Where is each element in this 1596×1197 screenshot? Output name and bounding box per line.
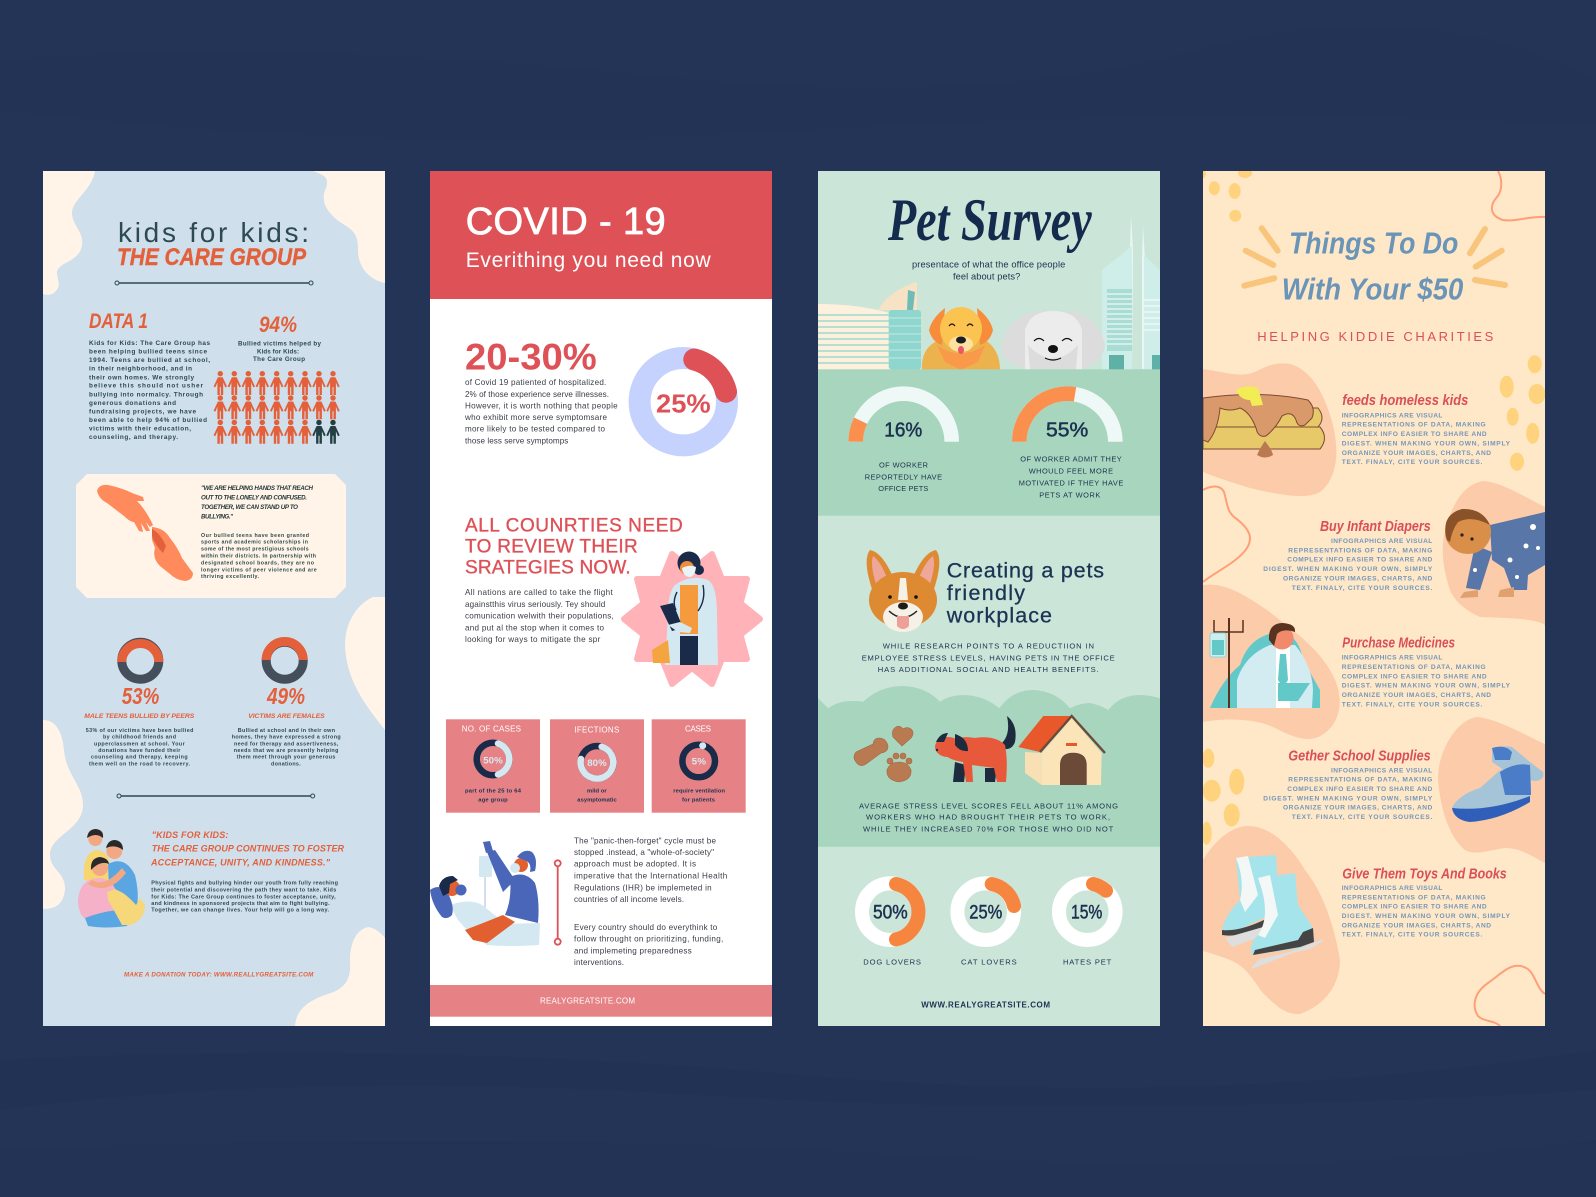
text block: toys: INFOGRAPHICS ARE VISUAL	[1342, 885, 1442, 892]
header band	[430, 171, 772, 299]
text block: diapers: REPRESENTATIONS OF DATA, MAKING	[1288, 547, 1432, 554]
text: quote: TOGETHER, WE CAN STAND UP TO	[201, 504, 298, 511]
stat box: no of cases: age group	[478, 797, 508, 803]
text block: all nations: comunication welwith their populations,	[465, 612, 614, 621]
stat box: cases	[652, 719, 746, 813]
heading: all countries: SRATEGIES NOW.	[465, 557, 631, 578]
chart: 15 percent hates pet: 15%	[1071, 902, 1102, 923]
icon: doctor with IV	[1210, 618, 1320, 708]
illustration: right towers	[1102, 215, 1160, 370]
band: cloud section	[818, 686, 1160, 847]
text block: feeds	[1342, 412, 1511, 466]
text block: intro: 1994. Teens are bullied at school,	[89, 357, 210, 364]
text: research: WHILE RESEARCH POINTS TO A REDUCTIION IN	[883, 642, 1094, 651]
text block: hospitalized: 2% of those experience serve illnesses.	[465, 390, 609, 399]
text: quote: OUT TO THE LONELY AND CONFUSED.	[201, 495, 307, 502]
text: motivated	[1019, 455, 1123, 499]
text block: physical fights: and kindness in sponsored projects that aim to fight bullying.	[151, 901, 330, 907]
chart: 15 percent hates pet: HATES PET	[1063, 958, 1112, 967]
chart: 55 percent gauge: 55%	[1046, 420, 1089, 442]
text block: toys	[1342, 885, 1511, 939]
text: quote: "WE ARE HELPING HANDS THAT REACH	[201, 485, 314, 492]
title: Pet Survey	[887, 187, 1092, 253]
text block: right stat: homes, they have expressed a strong	[232, 735, 341, 741]
text: scholarships	[200, 533, 317, 580]
text block: medicines: INFOGRAPHICS ARE VISUAL	[1342, 655, 1442, 662]
text: scholarships: within their districts. In partnership with	[200, 554, 316, 560]
text: research: HAS ADDITIONAL SOCIAL AND HEALTH BENEFITS.	[878, 665, 1099, 674]
text: office pets: OFFICE PETS	[878, 484, 928, 493]
chart: 50 percent dog lovers: DOG LOVERS	[863, 958, 921, 967]
text block: right stat	[232, 728, 341, 767]
text block: diapers: DIGEST. WHEN MAKING YOUR OWN, SIMPLY	[1263, 566, 1433, 573]
chart: 16 percent gauge	[856, 394, 952, 442]
stat box: no of cases: part of the 25 to 64	[465, 789, 522, 795]
subtitle	[912, 260, 1065, 281]
icon: corgi	[867, 550, 939, 632]
heading: buy infant diapers: Buy Infant Diapers	[1320, 518, 1431, 535]
text block: right stat: them meet through your generous	[237, 755, 335, 761]
text: office pets: OF WORKER	[879, 461, 928, 470]
text block: right stat: needs that we are presently helping	[234, 748, 338, 754]
stat: 20-30%: 20-30%	[465, 336, 597, 377]
text block: medicines: ORGANIZE YOUR IMAGES, CHARTS, AND	[1342, 692, 1491, 699]
footer band: REALYGREATSITE.COM	[540, 996, 635, 1005]
footer: website: WWW.REALYGREATSITE.COM	[921, 1001, 1050, 1010]
text block: panic then forget: imperative that the International Health	[574, 871, 727, 880]
icon: nurse and patient	[430, 841, 540, 946]
stat box: infections: mild or	[587, 789, 607, 795]
text block: all nations: againstthis virus seriously. Tey should	[465, 600, 605, 609]
text block: left stat: by childhood friends and	[103, 735, 176, 741]
text block: left stat: upperclassmen at school. Your	[94, 741, 186, 747]
text block: intro: bullying into normalcy. Through	[89, 391, 203, 398]
text block: supplies: INFOGRAPHICS ARE VISUAL	[1331, 767, 1432, 774]
label: victims females: VICTIMS ARE FEMALES	[248, 713, 325, 720]
text block: physical fights: Physical fights and bullying hinder our youth from fully reaching	[151, 881, 338, 887]
chart: 49 percent donut	[266, 642, 303, 679]
text block: intro: victims with their education,	[89, 425, 191, 432]
text block: intro: generous donations and	[89, 400, 176, 407]
stat box: no of cases	[446, 719, 540, 813]
chart: 15 percent hates pet	[1059, 883, 1116, 967]
text block: medicines	[1342, 655, 1511, 708]
panel: pet survey	[818, 171, 1160, 1026]
title: Things To Do	[1289, 225, 1458, 260]
text block: intro: fundraising projects, we have	[89, 408, 196, 415]
icon: red dog	[935, 716, 1016, 782]
panel: kids for kids	[43, 171, 385, 1026]
icon: dog house	[1018, 716, 1105, 785]
heading: creating pets friendly: workplace	[946, 604, 1052, 628]
text block: physical fights: Together, we can change lives. Your help will go a long way.	[151, 908, 329, 914]
stat box: infections	[550, 719, 644, 813]
text: scholarships: Our bullied teens have been granted	[201, 533, 309, 539]
text block: intro: been able to help 94% of bullied	[89, 417, 207, 424]
text block: hospitalized	[464, 378, 618, 446]
text: research: EMPLOYEE STRESS LEVELS, HAVING PETS IN THE OFFICE	[862, 653, 1115, 662]
text block: physical fights: their potential and discovering the path they want to take. Kids	[151, 888, 336, 894]
heading: all countries	[465, 516, 683, 578]
text block: diapers	[1263, 538, 1433, 592]
text: stress scores: AVERAGE STRESS LEVEL SCORES FELL ABOUT 11% AMONG	[859, 801, 1118, 810]
text block: supplies	[1263, 767, 1433, 821]
title: With Your $50	[1282, 271, 1463, 306]
text block: diapers: ORGANIZE YOUR IMAGES, CHARTS, AND	[1283, 576, 1433, 583]
text block: left stat	[86, 728, 193, 767]
chart: 25 percent cat lovers	[957, 883, 1017, 967]
stat box: no of cases: NO. OF CASES	[462, 725, 521, 734]
icon: doctor on pink star	[624, 552, 760, 684]
heading: creating pets friendly: Creating a pets	[947, 558, 1104, 582]
text: motivated: OF WORKER ADMIT THEY	[1020, 455, 1122, 464]
chart: 50 percent dog lovers	[862, 883, 921, 967]
footer: donation link: MAKE A DONATION TODAY: WWW.REALLYGREATSITE.COM	[124, 972, 314, 979]
text: scholarships: some of the most prestigious schools	[201, 547, 309, 553]
text block: hospitalized: those less serve symptomps	[465, 437, 568, 446]
text block: panic then forget: The "panic-then-forget" cycle must be	[574, 836, 716, 845]
text: scholarships: longer victims of peer violence and are	[201, 567, 317, 573]
text block: diapers: COMPLEX INFO EASIER TO SHARE AND	[1287, 557, 1433, 564]
text block: toys: ORGANIZE YOUR IMAGES, CHARTS, AND	[1342, 922, 1491, 929]
text block: diapers: INFOGRAPHICS ARE VISUAL	[1331, 538, 1432, 545]
text: motivated: WHOULD FEEL MORE	[1029, 467, 1113, 476]
text block: intro: Kids for Kids: The Care Group has	[89, 340, 210, 347]
text block: panic then forget: approach must be adopted. It is	[574, 860, 696, 869]
heading: purchase medicines: Purchase Medicines	[1342, 634, 1455, 651]
text block: medicines: REPRESENTATIONS OF DATA, MAKING	[1342, 664, 1486, 671]
text: research	[862, 642, 1115, 674]
text block: supplies: REPRESENTATIONS OF DATA, MAKING	[1288, 777, 1432, 784]
stat box: cases: 5%	[692, 757, 707, 768]
text block: supplies: ORGANIZE YOUR IMAGES, CHARTS, AND	[1283, 805, 1433, 812]
illustration: left buildings	[818, 282, 921, 370]
text block: medicines: COMPLEX INFO EASIER TO SHARE AND	[1342, 673, 1487, 680]
chart: 50 percent dog lovers: 50%	[873, 902, 908, 923]
text: office pets	[865, 461, 942, 493]
text: motivated: MOTIVATED IF THEY HAVE	[1019, 478, 1123, 487]
band: gauges	[818, 369, 1160, 516]
text block: right stat: need for therapy and assertiveness,	[234, 741, 339, 747]
text block: toys: TEXT. FINALY, CITE YOUR SOURCES.	[1342, 932, 1483, 939]
icon: baby	[1445, 509, 1545, 598]
icon: ice skates	[1222, 855, 1323, 968]
icons: title rays	[1244, 228, 1505, 286]
quote: foster acceptance: "KIDS FOR KIDS:	[152, 830, 228, 840]
chart: 25 percent cat lovers: CAT LOVERS	[961, 958, 1017, 967]
text block: panic then forget: Every country should do everythink to	[574, 923, 718, 932]
text: motivated: PETS AT WORK	[1039, 490, 1100, 499]
header band: Everithing you need now	[466, 249, 712, 272]
stat: 94%: 94%	[259, 312, 297, 337]
quote: foster acceptance: THE CARE GROUP CONTINUES TO FOSTER	[152, 844, 344, 854]
chart: 25 percent donut	[640, 358, 727, 445]
text block: medicines: TEXT. FINALY, CITE YOUR SOURCES.	[1342, 701, 1483, 708]
text: scholarships: sports and academic scholarships in	[201, 540, 308, 546]
subtitle: presentace of what the office people	[912, 260, 1065, 270]
text block: toys: REPRESENTATIONS OF DATA, MAKING	[1342, 894, 1486, 901]
icon: golden dog	[922, 307, 1000, 370]
heading: data 1: DATA 1	[89, 310, 148, 333]
stat box: cases: require ventilation	[673, 789, 725, 795]
stat box: infections: IFECTIONS	[574, 726, 619, 735]
icon: pancakes	[1203, 386, 1324, 458]
text block: panic then forget: interventions.	[574, 958, 624, 967]
text block: physical fights	[151, 881, 338, 914]
chart: 25 percent cat lovers: 25%	[969, 902, 1002, 923]
title: THE CARE GROUP	[117, 244, 307, 271]
text block: bullied victims: Bullied victims helped by	[238, 341, 322, 348]
text block: bullied victims: The Care Group	[253, 356, 305, 363]
heading: feeds homeless kids: feeds homeless kids	[1342, 392, 1468, 409]
chart: 55 percent gauge	[1019, 394, 1115, 442]
text block: panic then forget: countries of all income levels.	[574, 895, 684, 904]
quote: foster acceptance	[150, 830, 344, 867]
text: scholarships: thriving excellently.	[201, 574, 260, 580]
text: office pets: REPORTEDLY HAVE	[865, 472, 942, 481]
text block: all nations: looking for ways to mitigate the spr	[465, 635, 601, 644]
subtitle: feel about pets?	[953, 271, 1020, 281]
text block: left stat: them well on the road to recovery.	[89, 761, 190, 767]
text block: all nations: All nations are called to take the flight	[465, 588, 613, 597]
heading: give them toys and books: Give Them Toys And Books	[1342, 865, 1507, 882]
stat box: cases: CASES	[685, 725, 711, 734]
stat: 49%: 49%	[266, 683, 305, 709]
text: stress scores	[859, 801, 1118, 833]
icon: dog treats	[854, 726, 913, 782]
text block: right stat: donations.	[271, 761, 301, 767]
chart: 16 percent gauge: 16%	[884, 420, 923, 442]
heading: gether school supplies: Gether School Supplies	[1288, 748, 1431, 765]
text block: left stat: 53% of our victims have been bullied	[86, 728, 193, 734]
text block: bullied victims	[238, 341, 322, 363]
icon: helping hands	[97, 485, 193, 581]
text block: panic then forget: stopped .instead, a "whole-of-society"	[574, 848, 714, 857]
text block: intro: counseling, and therapy.	[89, 434, 178, 441]
text block: right stat: Bullied at school and in their own	[238, 728, 335, 734]
title	[118, 222, 306, 266]
text block: panic then forget: Regulations (IHR) be implemeted in	[574, 883, 712, 892]
text block: feeds: INFOGRAPHICS ARE VISUAL	[1342, 412, 1442, 419]
text block: left stat: donations have funded their	[98, 748, 181, 754]
text block: medicines: DIGEST. WHEN MAKING YOUR OWN, SIMPLY	[1342, 683, 1511, 690]
heading: creating pets friendly: friendly	[947, 581, 1025, 605]
text block: feeds: TEXT. FINALY, CITE YOUR SOURCES.	[1342, 459, 1483, 466]
icon: family with dog	[78, 829, 145, 928]
text block: hospitalized: of Covid 19 patiented of hospitalized.	[465, 378, 606, 387]
icon: shoes	[1452, 746, 1543, 822]
panel: helping hands quote	[76, 474, 346, 598]
text block: panic then forget: follow throught on prioritizing, funding,	[574, 935, 723, 944]
text: quote	[201, 485, 314, 520]
stat box: no of cases: 50%	[483, 755, 503, 766]
text block: toys: DIGEST. WHEN MAKING YOUR OWN, SIMPLY	[1342, 913, 1511, 920]
stat box: infections: asymptomatic	[577, 797, 617, 803]
text: quote: BULLYING."	[201, 513, 233, 520]
text block: all nations	[465, 588, 614, 644]
text: stress scores: WORKERS WHO HAD BROUGHT THEIR PETS TO WORK,	[866, 813, 1110, 822]
heading: creating pets friendly	[946, 558, 1104, 628]
text block: intro: been helping bullied teens since	[89, 349, 207, 356]
title	[1282, 225, 1463, 306]
timeline marker	[555, 860, 561, 945]
text block: supplies: DIGEST. WHEN MAKING YOUR OWN, SIMPLY	[1263, 795, 1433, 802]
title: kids for kids:	[118, 217, 309, 248]
text block: panic then forget	[574, 836, 727, 967]
text block: physical fights: for Kids: The Care Group continues to foster acceptance, unity,	[151, 894, 336, 900]
heading: all countries: TO REVIEW THEIR	[465, 537, 638, 558]
pictogram: 94 percent people	[214, 371, 340, 444]
text block: diapers: TEXT. FINALY, CITE YOUR SOURCES.	[1292, 585, 1433, 592]
text block: supplies: TEXT. FINALY, CITE YOUR SOURCES.	[1292, 814, 1433, 821]
text block: all nations: and put al the stop when it comes to	[465, 623, 604, 632]
text block: intro: their own homes. We strongly	[89, 374, 194, 381]
subtitle: HELPING KIDDIE CHARITIES	[1257, 329, 1494, 344]
chart: 25 percent donut: 25%	[656, 388, 711, 418]
text block: bullied victims: Kids for Kids:	[257, 348, 299, 355]
chart: 53 percent donut	[122, 642, 159, 679]
stat box: infections: 80%	[587, 758, 607, 769]
text block: hospitalized: more likely to be tested compared to	[465, 425, 605, 434]
text block: supplies: COMPLEX INFO EASIER TO SHARE AND	[1287, 786, 1433, 793]
text: scholarships: designated school boards, they are no	[201, 560, 315, 566]
text block: hospitalized: who exhibit more serve symptomsare	[464, 413, 607, 422]
text block: feeds: DIGEST. WHEN MAKING YOUR OWN, SIMPLY	[1342, 440, 1511, 447]
quote: foster acceptance: ACCEPTANCE, UNITY, AND KINDNESS."	[150, 857, 331, 867]
text block: toys: COMPLEX INFO EASIER TO SHARE AND	[1342, 904, 1487, 911]
footer band	[430, 985, 772, 1017]
label: male teens: MALE TEENS BULLIED BY PEERS	[84, 713, 195, 720]
text block: intro: in their neighborhood, and in	[89, 366, 192, 373]
text block: left stat: counseling and therapy, keeping	[91, 755, 188, 761]
panel: covid 19	[430, 171, 772, 1026]
text block: panic then forget: and implemeting preparedness	[574, 946, 692, 955]
text block: intro: believe this should not usher	[89, 383, 204, 390]
header band: COVID - 19	[466, 201, 666, 243]
panel: things to do	[1200, 168, 1546, 1026]
text block: hospitalized: However, it is worth nothing that people	[465, 401, 618, 410]
heading: all countries: ALL COUNRTIES NEED	[465, 516, 683, 537]
icon: white dog	[1001, 311, 1105, 370]
text block: feeds: COMPLEX INFO EASIER TO SHARE AND	[1342, 431, 1487, 438]
text: stress scores: WHILE THEY INCREASED 70% FOR THOSE WHO DID NOT	[863, 824, 1114, 833]
stat box: cases: for patients	[682, 797, 715, 803]
stat: 53%: 53%	[122, 683, 159, 709]
text block: intro	[89, 340, 210, 441]
text block: feeds: ORGANIZE YOUR IMAGES, CHARTS, AND	[1342, 450, 1491, 457]
text block: feeds: REPRESENTATIONS OF DATA, MAKING	[1342, 422, 1486, 429]
